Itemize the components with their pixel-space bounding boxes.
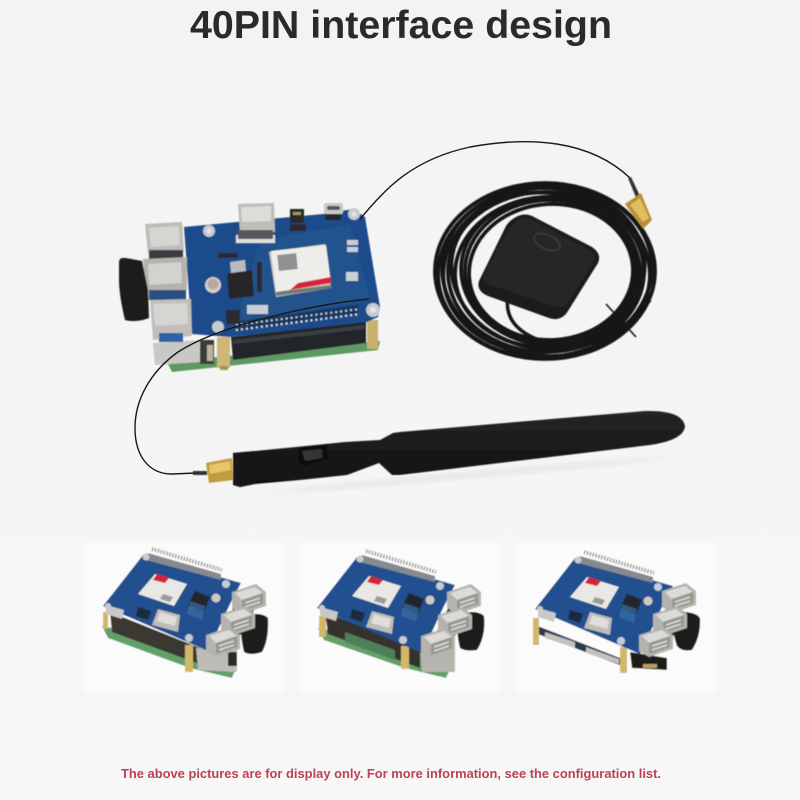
USB-C connector [324, 203, 343, 220]
HAT top [535, 552, 686, 654]
cable: upper antenna wire [360, 142, 630, 219]
blue HAT board [184, 209, 380, 337]
switch [290, 209, 304, 223]
regulator chip [227, 260, 254, 299]
dongle [457, 612, 484, 651]
green board and lower ports [102, 626, 237, 678]
cable: lower antenna wire [135, 299, 369, 474]
card 1 [84, 541, 285, 694]
card 2 [299, 541, 500, 694]
USB stack [232, 584, 266, 614]
zip tie [606, 304, 636, 337]
USB stack [662, 583, 696, 613]
SIM module [269, 244, 332, 297]
dongle [241, 614, 268, 654]
card 3 [515, 541, 716, 694]
HAT top [317, 551, 468, 653]
top USB-A connector [236, 203, 275, 243]
mounting holes [203, 208, 380, 333]
pin header row on board [234, 305, 358, 331]
dongle [673, 612, 700, 650]
SMA connector lower [193, 458, 233, 483]
capacitor [205, 277, 221, 293]
HAT top [103, 549, 254, 651]
footer note: The above pictures are for display only. For more information, see the configuration list. [121, 766, 661, 781]
main product: HAT board on Raspberry Pi [119, 203, 380, 372]
SMA connector upper [625, 177, 652, 229]
green Raspberry Pi board [167, 341, 380, 372]
black GPIO header [231, 321, 366, 360]
GPS antenna puck [478, 214, 599, 319]
gold standoffs [217, 320, 378, 370]
rubber antenna [193, 411, 685, 496]
GPS antenna cable coil [431, 175, 659, 366]
antenna hinge window [298, 445, 328, 466]
USB stack [447, 584, 481, 614]
black USB dongle [119, 258, 149, 321]
small parts on board [218, 224, 306, 324]
title: 40PIN interface design [190, 4, 612, 47]
ethernet port [153, 340, 202, 365]
left USB stack [143, 222, 192, 342]
